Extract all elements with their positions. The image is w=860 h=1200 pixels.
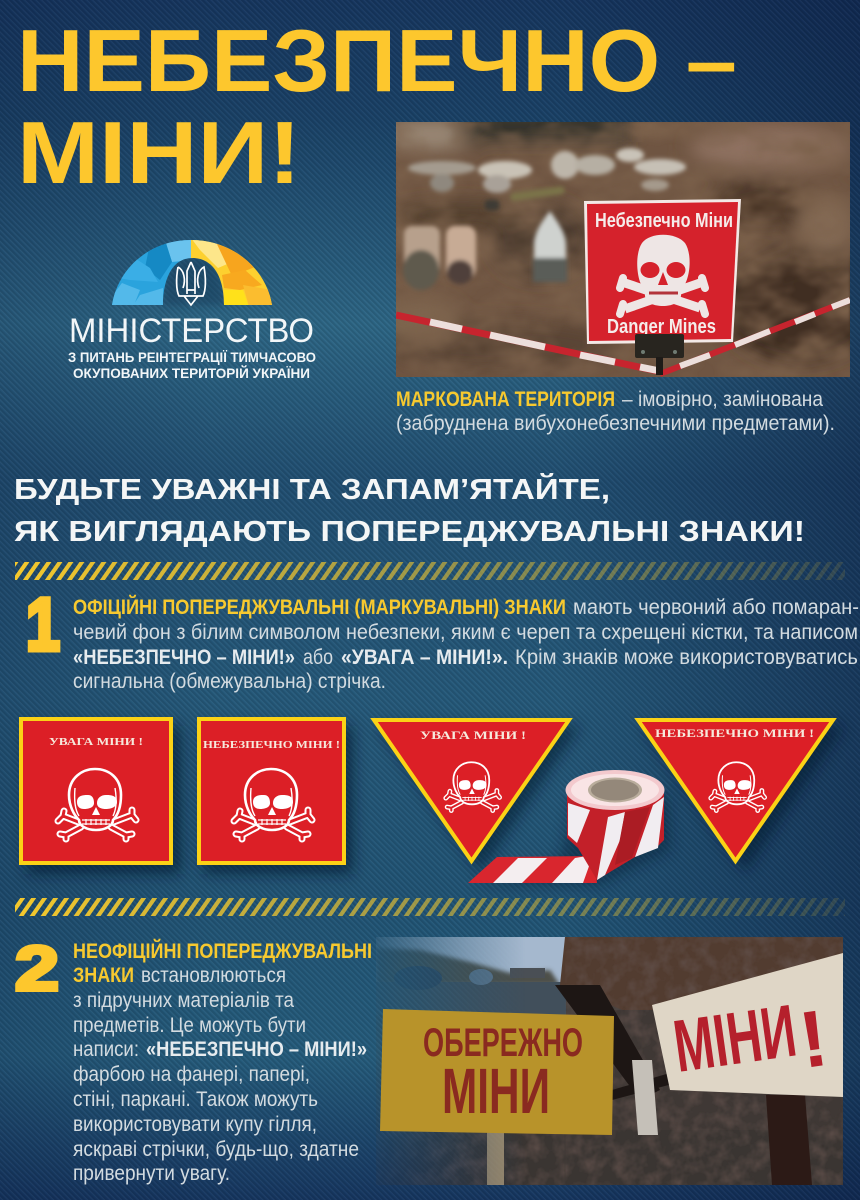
section 2 text: фарбою на фанері, папері, (73, 1063, 310, 1086)
sign: square УВАГА МІНИ (21, 719, 181, 874)
section 2 text: привернути увагу. (73, 1162, 230, 1185)
photo: marked territory with danger sign (380, 112, 860, 377)
title: НЕБЕЗПЕЧНО – (17, 11, 737, 110)
section 2 text: НЕОФІЦІЙНІ ПОПЕРЕДЖУВАЛЬНІ (73, 939, 372, 963)
brush (560, 937, 843, 1017)
section 2 number: 2 (15, 934, 59, 1004)
photo caption: – імовірно, замінована (622, 388, 823, 411)
sign: triangle УВАГА МІНИ: УВАГА МІНИ ! (420, 730, 526, 742)
yellow sign (380, 1009, 614, 1135)
section 2 text: стіні, паркані. Також можуть (73, 1088, 318, 1111)
photo: improvised warning signs (376, 937, 843, 1185)
section 1 number: 1 (26, 583, 60, 666)
ministry logo (68, 235, 316, 381)
section 1 text (73, 595, 859, 693)
section 2 text: написи: (73, 1038, 139, 1061)
photo caption: МАРКОВАНА ТЕРИТОРІЯ (396, 388, 615, 411)
white board sign: ! (794, 993, 833, 1085)
photo caption: (забруднена вибухонебезпечними предметами). (396, 412, 835, 435)
photo caption (396, 388, 835, 435)
blurred mines (403, 148, 686, 290)
section 1 text: сигнальна (обмежувальна) стрічка. (73, 670, 386, 693)
sky (376, 937, 576, 982)
section 1 text: ОФІЦІЙНІ ПОПЕРЕДЖУВАЛЬНІ (МАРКУВАЛЬНІ) ЗНАКИ (73, 595, 566, 619)
title: МІНИ! (17, 103, 301, 202)
white board sign (652, 953, 843, 1097)
section 1 text: «УВАГА – МІНИ!». (341, 646, 508, 669)
section 1 text: Крім знаків може використовуватись (515, 646, 858, 669)
sign: triangle НЕБЕЗПЕЧНО МІНИ: НЕБЕЗПЕЧНО МІНИ ! (655, 728, 814, 740)
danger sign (584, 199, 741, 375)
sign: square УВАГА МІНИ: УВАГА МІНИ ! (49, 737, 143, 748)
section 2 text (73, 939, 372, 1185)
icon: barrier tape roll (468, 770, 670, 885)
section 2 text: предметів. Це можуть бути (73, 1014, 306, 1037)
logo text (68, 312, 316, 381)
danger sign: Danger Mines (607, 316, 716, 338)
section 2 text: «НЕБЕЗПЕЧНО – МІНИ!» (146, 1038, 367, 1061)
sign: square НЕБЕЗПЕЧНО МІНИ: НЕБЕЗПЕЧНО МІНИ ! (203, 740, 340, 751)
title (17, 11, 737, 202)
logo text: МІНІСТЕРСТВО (69, 312, 314, 350)
section 1 text: «НЕБЕЗПЕЧНО – МІНИ!» (73, 646, 295, 669)
icon: arch with trident (112, 240, 272, 306)
yellow sign: МІНИ (442, 1055, 550, 1127)
section 2 text: яскраві стрічки, будь-що, здатне (73, 1138, 359, 1161)
sign: square НЕБЕЗПЕЧНО МІНИ (199, 719, 353, 874)
logo text: З ПИТАНЬ РЕІНТЕГРАЦІЇ ТИМЧАСОВО (68, 349, 316, 365)
yellow sign: ОБЕРЕЖНО (423, 1021, 583, 1065)
road tape (396, 300, 850, 374)
danger sign: Небезпечно Міни (595, 210, 733, 232)
heading: be careful (14, 472, 805, 548)
heading: be careful: БУДЬТЕ УВАЖНІ ТА ЗАПАМ’ЯТАЙТЕ, (14, 472, 610, 506)
sign: triangle УВАГА МІНИ (374, 720, 580, 872)
section 2 text: з підручних матеріалів та (73, 989, 294, 1012)
tape roll body (567, 790, 664, 880)
section 1 text: або (303, 646, 333, 669)
shells (404, 226, 440, 274)
section 2 text: встановлюються (141, 964, 286, 987)
sign: triangle НЕБЕЗПЕЧНО МІНИ (638, 720, 844, 872)
tape strip (468, 855, 597, 883)
logo text: ОКУПОВАНИХ ТЕРИТОРІЙ УКРАЇНИ (73, 364, 310, 381)
heading: be careful: ЯК ВИГЛЯДАЮТЬ ПОПЕРЕДЖУВАЛЬНІ ЗНАКИ! (14, 516, 805, 548)
wooden barrier (555, 985, 660, 1100)
section 2 text: використовувати купу гілля, (73, 1113, 317, 1136)
section 2 text: ЗНАКИ (73, 964, 134, 987)
